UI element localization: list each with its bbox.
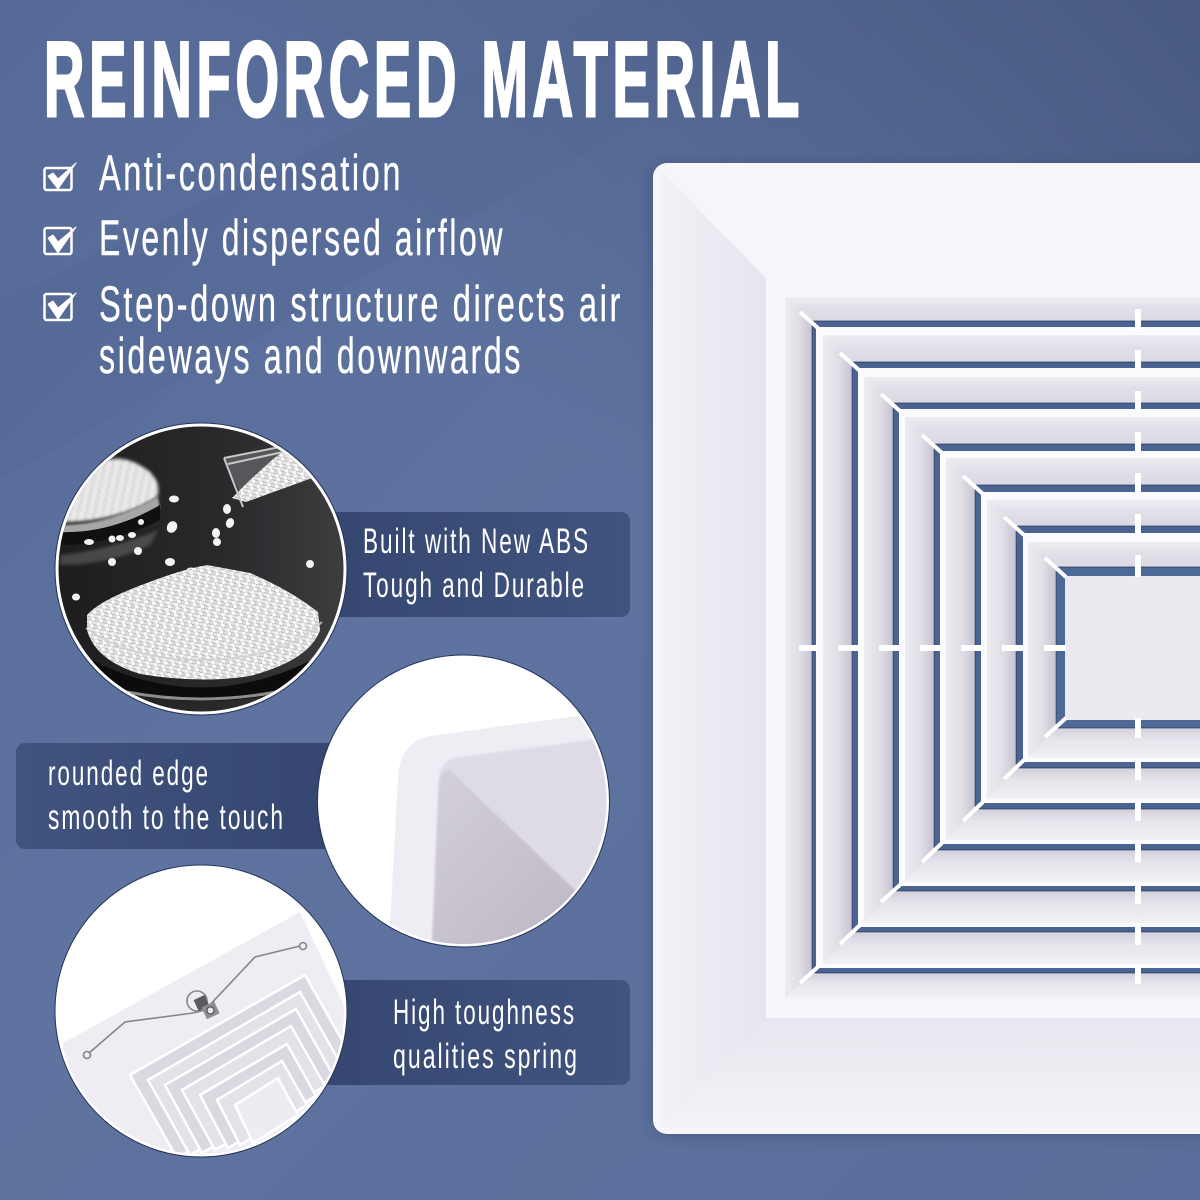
feature list [44,145,623,384]
text: step-down structure: sideways and downwards [99,328,523,384]
test tube [224,447,312,507]
diagonal corner struts [800,312,1066,983]
text: evenly dispersed airflow: Evenly dispersed airflow [99,210,505,266]
back dish [55,459,160,565]
callout: new ABS: Built with New ABS [363,522,590,561]
callout: spring: High toughness [393,993,576,1032]
small louver rings [130,975,352,1158]
callout: new ABS [300,512,630,617]
callout: rounded edge [16,743,346,849]
louvers [785,297,1200,998]
icon: check 1 [44,163,76,190]
text: step-down structure: Step-down structure directs air [99,276,623,332]
callout: new ABS: Tough and Durable [363,566,586,605]
circle photo: rounded edge [318,655,620,960]
spring wire [84,942,306,1058]
falling granules [72,496,314,600]
callout: rounded edge: rounded edge [48,754,210,793]
vent frame [653,163,1200,1134]
rounded corner plate [390,716,592,940]
callout: rounded edge: smooth to the touch [48,798,285,837]
panel: vent grille [653,163,1200,1134]
circle photo: ABS granules [55,423,347,715]
callout: spring: qualities spring [393,1037,579,1076]
callout: spring [300,980,630,1085]
center plate [1065,576,1200,720]
icon: check 3 [44,293,76,320]
front dish [86,565,322,701]
icon: check 2 [44,227,76,254]
vent plate [63,912,344,1154]
spring clip [194,995,220,1020]
text: anti-condensation: Anti-condensation [99,145,403,201]
vertical and horizontal spars [799,309,1141,984]
circle photo: spring [55,865,360,1170]
text: step-down structure [99,276,623,384]
